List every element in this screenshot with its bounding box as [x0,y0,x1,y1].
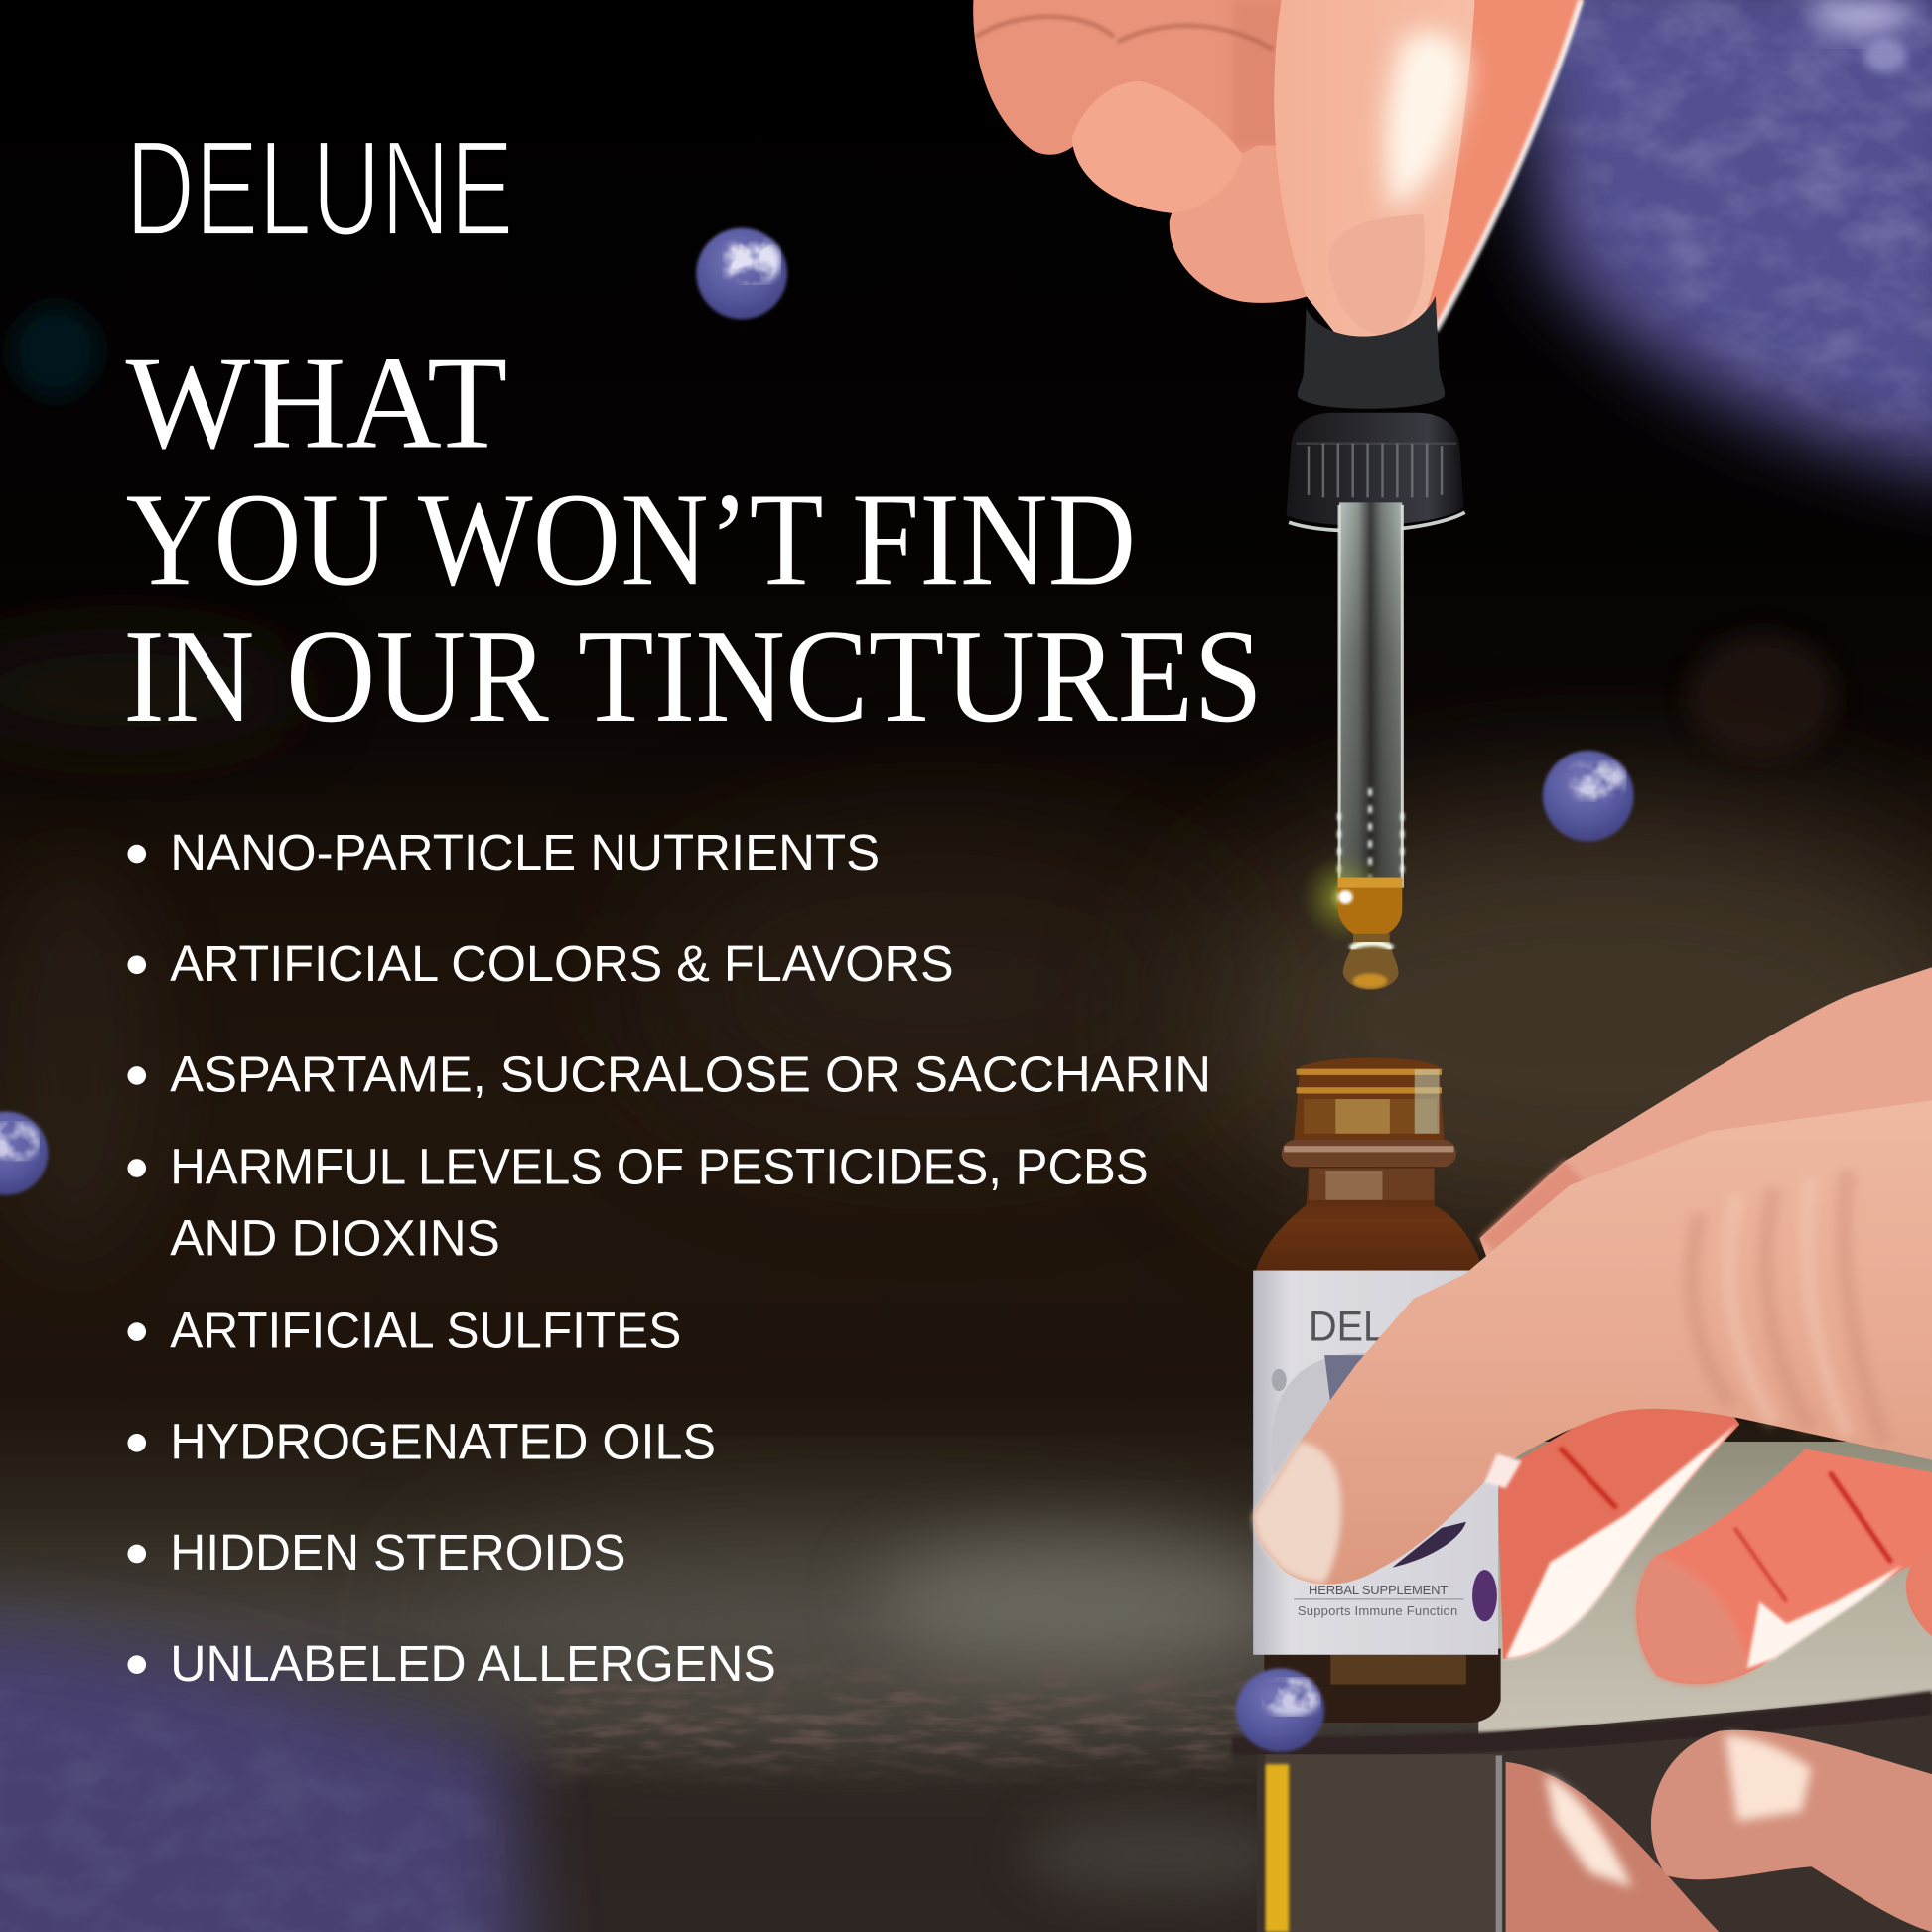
label dose badge [1472,1570,1497,1621]
dropper glow [1299,850,1392,944]
table surface with marble texture [542,1442,1932,1932]
purple textured panel: bottom left [0,1620,536,1932]
headline line 1: WHAT [126,330,507,477]
list item: nano-particle nutrients: NANO-PARTICLE NUTRIENTS [170,824,880,881]
hand holding dropper [973,0,1584,343]
back of hand and first finger [973,0,1307,160]
label herbal supplement: HERBAL SUPPLEMENT [1309,1583,1448,1597]
icon: berry beside bottle [1236,1668,1324,1752]
third finger [1170,145,1309,303]
second finger [1072,81,1242,213]
list item: artificial sulfites: ARTIFICIAL SULFITES [170,1303,681,1359]
upper finger behind thumb [1480,967,1932,1269]
right finger [1417,0,1584,337]
list item: unlabeled allergens: UNLABELED ALLERGENS [170,1635,776,1692]
list item: artificial colors and flavors: ARTIFICIAL COLORS & FLAVORS [170,935,954,992]
bottle base [1264,1649,1501,1723]
index finger [1274,0,1475,343]
list item: sweeteners: ASPARTAME, SUCRALOSE OR SACCHARIN [170,1046,1211,1103]
finger two [1636,1449,1932,1684]
bottle shoulders [1254,1167,1484,1276]
headline line 2: YOU WON’T FIND [126,466,1136,613]
label art [1271,1353,1380,1554]
bullet list of excluded ingredients [127,824,1211,1692]
amber tincture bottle [1253,1057,1501,1723]
dropper [1287,296,1465,989]
knuckle wrinkles [1692,1171,1885,1445]
headline line 3: IN OUR TINCTURES [123,603,1263,750]
label brand: DEL [1309,1303,1385,1349]
finger one [1497,1405,1739,1659]
dropper cap [1287,413,1463,525]
finger three [1906,1550,1932,1636]
thumb [1253,1100,1932,1585]
icon: berry at left edge [0,1111,48,1195]
creases [976,17,1273,50]
list item: pesticides, PCBs and dioxins [127,1139,1149,1267]
purple textured panel: top right [1497,0,1932,481]
headline [123,330,1263,750]
front thumb and hand [1253,967,1932,1585]
list item: hydrogenated oils: HYDROGENATED OILS [170,1413,716,1469]
reflection in table: bottle and fingers [1266,1730,1932,1932]
bottle neck [1294,1057,1445,1140]
dropper rubber bulb [1298,296,1445,409]
drop [1343,934,1399,989]
dropper glass tube [1339,502,1402,888]
list item: hidden steroids: HIDDEN STEROIDS [170,1524,625,1581]
list item: pesticides, PCBs and dioxins: HARMFUL LEVELS OF PESTICIDES, PCBS [170,1139,1149,1195]
thumbnail [1253,1442,1341,1584]
logo: DELUNE: DELUNE [126,112,514,265]
list item: pesticides, PCBs and dioxins: AND DIOXINS [170,1210,500,1267]
dropper amber liquid [1338,878,1402,939]
icon: berry beside dropper [1543,751,1634,842]
label claim: Supports Immune Function [1298,1603,1457,1618]
back fingers of lower hand, lit red [1497,1405,1932,1685]
bottle label [1253,1271,1498,1670]
icon: berry near logo [696,228,787,319]
